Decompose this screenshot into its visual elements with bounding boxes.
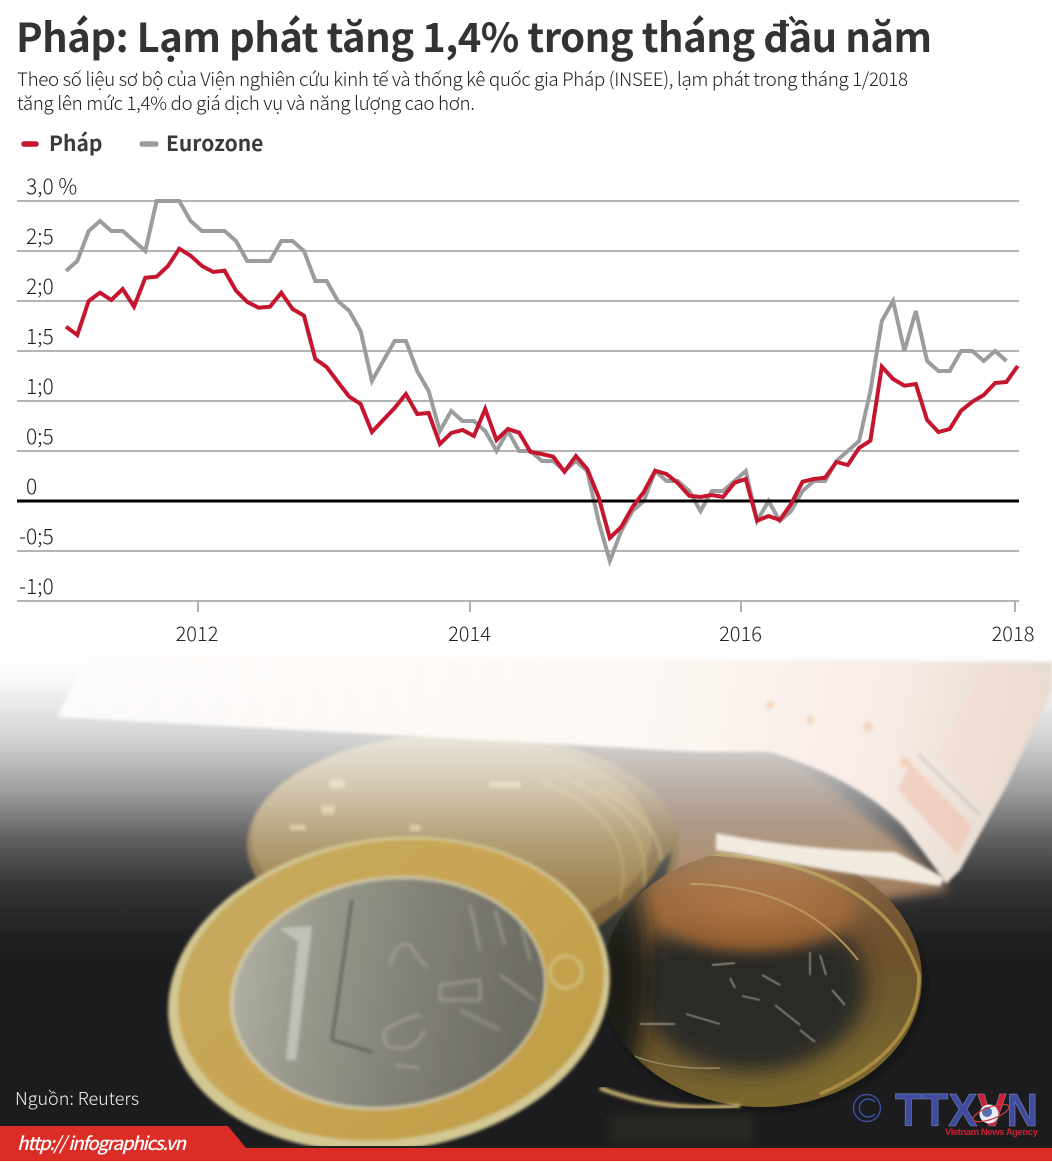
bright lower flap of banknote	[716, 833, 945, 886]
source text: Nguồn: Reuters	[15, 1085, 139, 1111]
icon: copyright	[854, 1094, 880, 1122]
y axis labels: 1;0	[26, 371, 54, 401]
logo: TTXVN: TTXVN	[895, 1084, 1038, 1136]
legend	[24, 128, 263, 158]
y axis labels: 2;0	[26, 271, 54, 301]
intro text	[17, 65, 908, 116]
footer band	[0, 1126, 1052, 1161]
fade overlay	[0, 650, 1052, 960]
series: Eurozone	[66, 201, 1006, 561]
logo: TTXVN: Vietnam News Agency	[945, 1127, 1039, 1138]
title: Pháp: Lạm phát tăng 1,4% trong tháng đầu năm	[16, 6, 932, 64]
line chart	[17, 171, 1034, 647]
coin relief marks	[384, 905, 535, 1068]
x axis labels: 2012	[176, 618, 218, 647]
coin relief marks	[640, 952, 845, 1042]
x axis labels: 2014	[448, 618, 491, 647]
y axis labels: -0;5	[19, 521, 54, 551]
intro text: Theo số liệu sơ bộ của Viện nghiên cứu kinh tế và thống kê quốc gia Pháp (INSEE), lạm phát trong tháng 1/2018	[17, 65, 908, 92]
legend: Eurozone	[166, 128, 263, 158]
x axis labels: 2018	[992, 618, 1034, 647]
y axis labels: -1;0	[19, 571, 54, 601]
back coin	[247, 732, 679, 960]
y axis labels: 2;5	[26, 221, 54, 251]
y axis labels: 1;5	[26, 321, 54, 351]
y axis labels	[19, 171, 77, 601]
y axis labels: 0;5	[26, 421, 54, 451]
series: Pháp	[66, 249, 1018, 538]
zero line	[17, 500, 1019, 502]
shadow under banknote	[590, 740, 950, 905]
y axis labels: 3,0 %	[26, 171, 77, 201]
right coin	[590, 845, 927, 1145]
y axis labels: 0	[26, 471, 37, 501]
intro text: tăng lên mức 1,4% do giá dịch vụ và năng lượng cao hơn.	[17, 89, 475, 116]
x axis labels	[176, 618, 1034, 647]
banknote	[57, 655, 1052, 884]
legend: Pháp	[49, 128, 102, 158]
x axis labels: 2016	[719, 618, 762, 647]
footer url: http:// infographics.vn	[17, 1130, 187, 1156]
photo: euro coins and banknote	[0, 650, 1052, 1162]
main coin	[147, 809, 631, 1162]
bottom dark foreground	[0, 1146, 1052, 1149]
